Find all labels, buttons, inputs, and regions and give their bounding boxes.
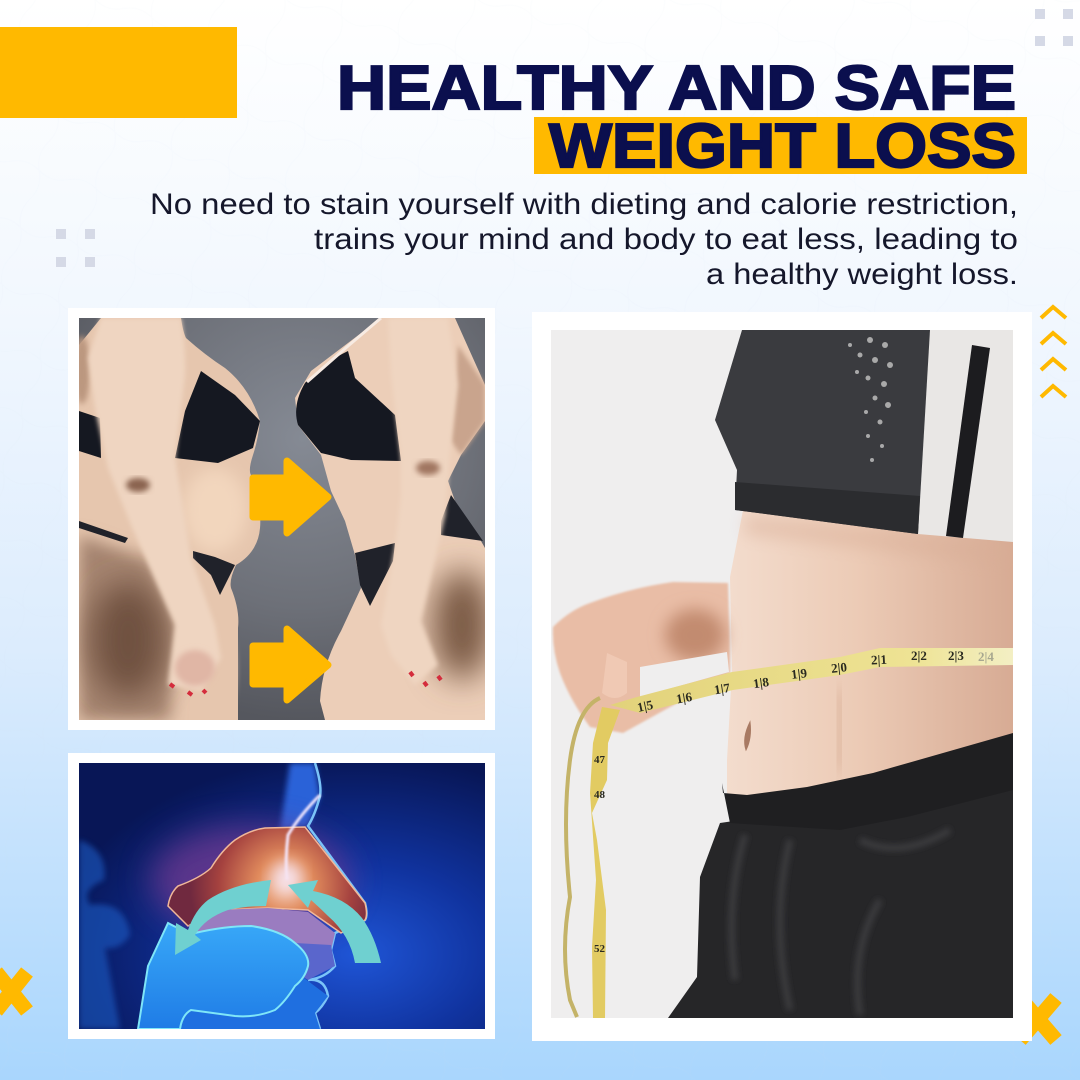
icon: right airflow arrow [288, 880, 381, 963]
before belly highlight [183, 468, 247, 552]
tape hanging loop [565, 698, 600, 1017]
lower jaw [181, 978, 328, 1029]
after bra [296, 351, 401, 461]
sinus cavity [168, 827, 366, 933]
navel [745, 722, 750, 750]
shorts folds [732, 830, 950, 1015]
description text: a healthy weight loss. [706, 258, 1018, 291]
after arm [381, 318, 458, 685]
title line 1: HEALTHY AND SAFE [337, 54, 1016, 123]
icon: yellow x right [1020, 998, 1056, 1040]
hanging tape numbers: 52 [594, 943, 606, 955]
decorative dots top right [1035, 9, 1073, 46]
black stripe [946, 345, 990, 538]
abdominal line [838, 690, 841, 770]
icon: left airflow arrow [175, 880, 271, 955]
waistband of top [735, 482, 920, 534]
chevrons icon [1041, 307, 1066, 397]
shorts [668, 780, 1013, 1018]
measuring tape [610, 648, 1013, 713]
before underwear [79, 521, 235, 595]
nerve glow [286, 795, 320, 880]
before back shading [79, 334, 91, 406]
before arm [88, 318, 221, 691]
icon: upper arrow [253, 461, 328, 533]
after body [295, 318, 485, 720]
forehead outline [308, 763, 366, 1029]
after thigh shadow [432, 570, 492, 680]
before thigh highlight [238, 644, 240, 696]
throat region [295, 943, 335, 980]
wrist shadow [665, 609, 725, 661]
after elbow shadow [416, 461, 440, 475]
tape numbers: 1|5 [636, 697, 655, 715]
after strap [307, 318, 381, 382]
palate [188, 908, 335, 950]
before hand shading [175, 650, 215, 686]
hanging tape numbers: 47 [594, 754, 606, 766]
tape numbers: 2|1 [871, 652, 887, 667]
title line 2 with yellow highlight: WEIGHT LOSS [549, 112, 1016, 181]
before body [79, 318, 260, 720]
thumb [602, 653, 627, 698]
tape numbers: 1|9 [790, 665, 808, 682]
panel: nose photo [68, 753, 495, 1039]
before thigh shadow [90, 582, 166, 698]
white panel on top [918, 330, 1013, 542]
under-top shadow [740, 514, 901, 546]
hanging tape numbers [594, 754, 606, 955]
tape hanging strip [590, 707, 620, 1018]
tape numbers: 1|6 [675, 689, 694, 706]
purple glow [150, 825, 350, 935]
gap between arm and tape [640, 652, 729, 697]
torso [727, 500, 1013, 800]
tape numbers: 1|7 [713, 680, 732, 697]
tape numbers: 1|8 [752, 674, 770, 691]
after forearm shade [451, 345, 485, 455]
sports top [715, 330, 935, 534]
arm and hand [553, 582, 730, 733]
description text: trains your mind and body to eat less, leading to [314, 223, 1018, 256]
icon: yellow x left [0, 972, 27, 1011]
description text: No need to stain yourself with dieting and calorie restriction, [150, 188, 1018, 221]
panel: before and after photo [68, 308, 495, 730]
tape numbers: 2|2 [911, 648, 927, 663]
tape numbers [636, 648, 994, 715]
before lower body mid tone [79, 535, 175, 720]
tape numbers: 2|4 [978, 649, 994, 664]
before elbow shadow [126, 478, 150, 492]
after underwear [355, 495, 483, 606]
nose bridge glow [280, 763, 320, 830]
nails [170, 672, 441, 695]
spine [79, 840, 130, 1029]
yellow corner block [0, 27, 237, 118]
hanging tape numbers: 48 [594, 789, 606, 801]
icon: lower arrow [253, 629, 328, 700]
tape numbers: 2|0 [830, 659, 848, 676]
panel: waist measuring photo [532, 312, 1032, 1041]
decorative dots left [56, 229, 95, 267]
mouth cavity [138, 923, 308, 1029]
tape numbers: 2|3 [948, 648, 964, 663]
before bra [79, 371, 260, 463]
shorts waistband [722, 733, 1013, 830]
description text [150, 188, 1018, 291]
centre glow [273, 862, 301, 894]
dots on top [848, 337, 893, 462]
